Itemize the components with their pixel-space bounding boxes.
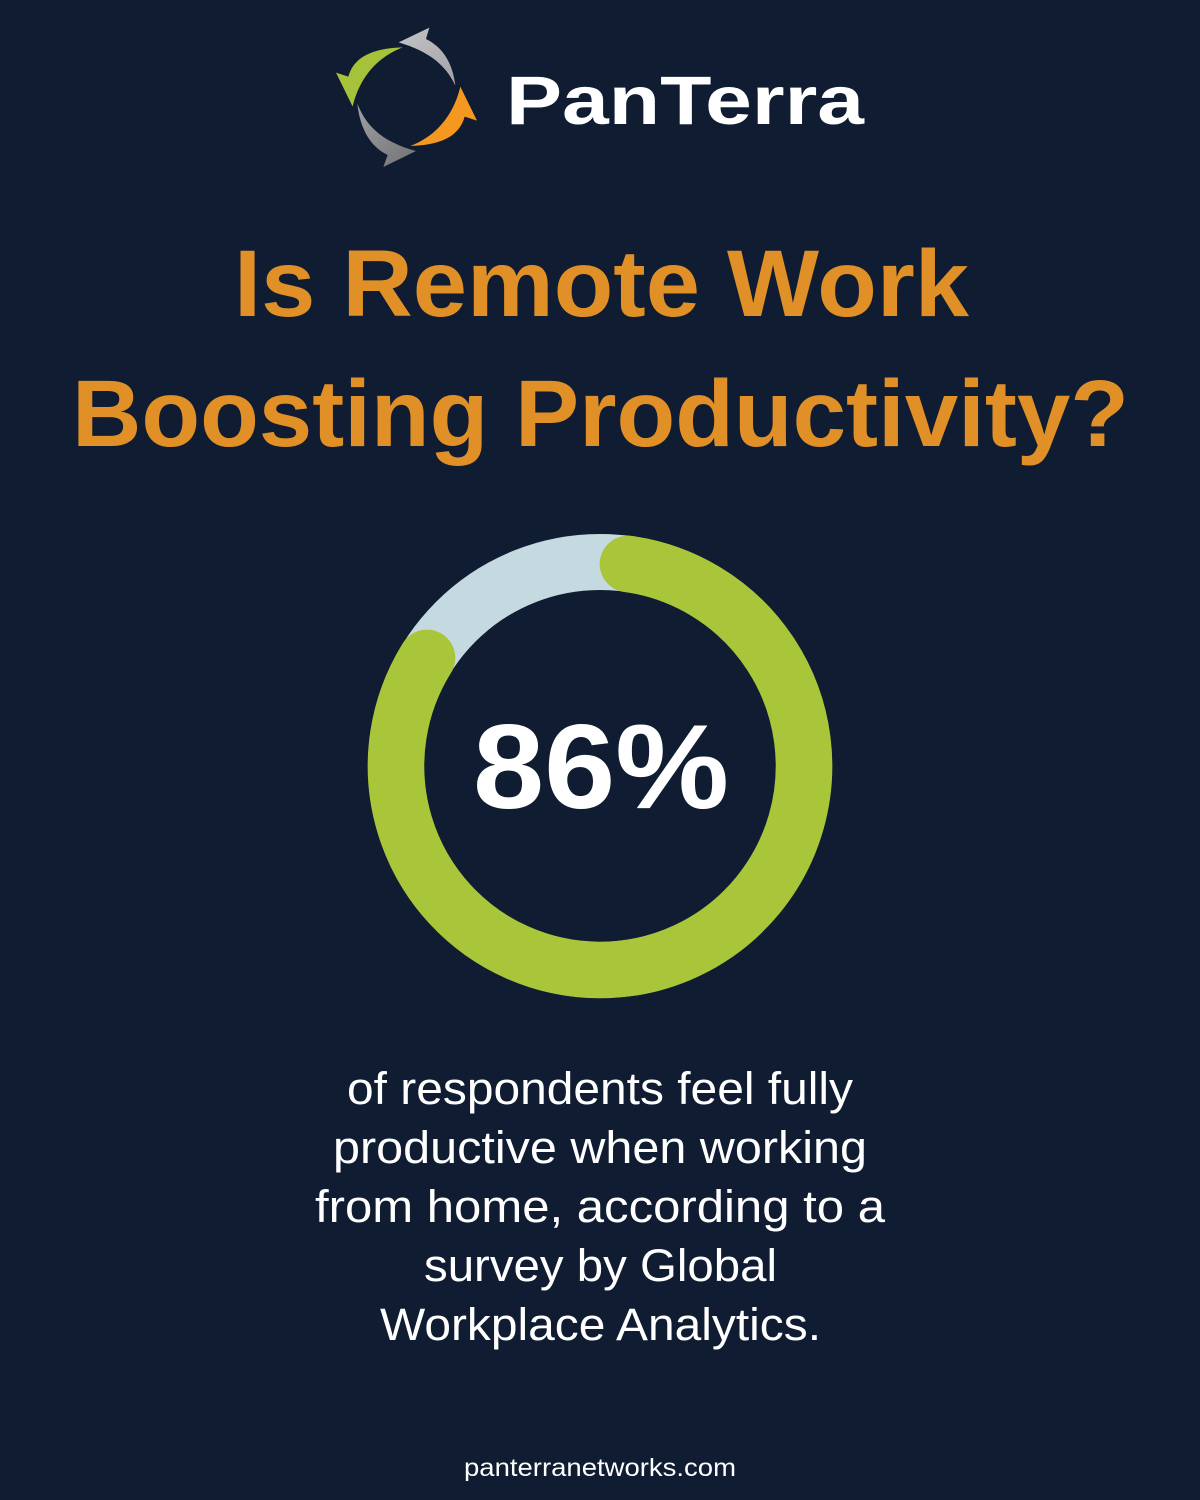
arrow: orange	[410, 87, 477, 146]
title	[72, 231, 1129, 467]
donut value label: 86%	[473, 700, 729, 834]
donut value arc	[396, 564, 804, 970]
description line 5: Workplace Analytics.	[380, 1299, 821, 1350]
description line 4: survey by Global	[424, 1240, 777, 1291]
footer website: panterranetworks.com	[464, 1454, 736, 1482]
description line 3: from home, according to a	[315, 1181, 886, 1232]
arrow: dark gray	[357, 104, 416, 167]
icon: four circular arrows	[336, 28, 477, 167]
description text	[315, 1063, 886, 1350]
donut chart: 86%	[396, 562, 804, 970]
arrow: green	[336, 47, 403, 107]
title line 2: Boosting Productivity?	[72, 361, 1129, 467]
donut track	[396, 562, 804, 970]
title line 1: Is Remote Work	[234, 231, 969, 337]
logo: PanTerra	[336, 28, 865, 167]
description line 2: productive when working	[333, 1122, 867, 1173]
logo wordmark: PanTerra	[506, 62, 865, 139]
description line 1: of respondents feel fully	[347, 1063, 854, 1114]
arrow: light gray	[399, 28, 455, 86]
